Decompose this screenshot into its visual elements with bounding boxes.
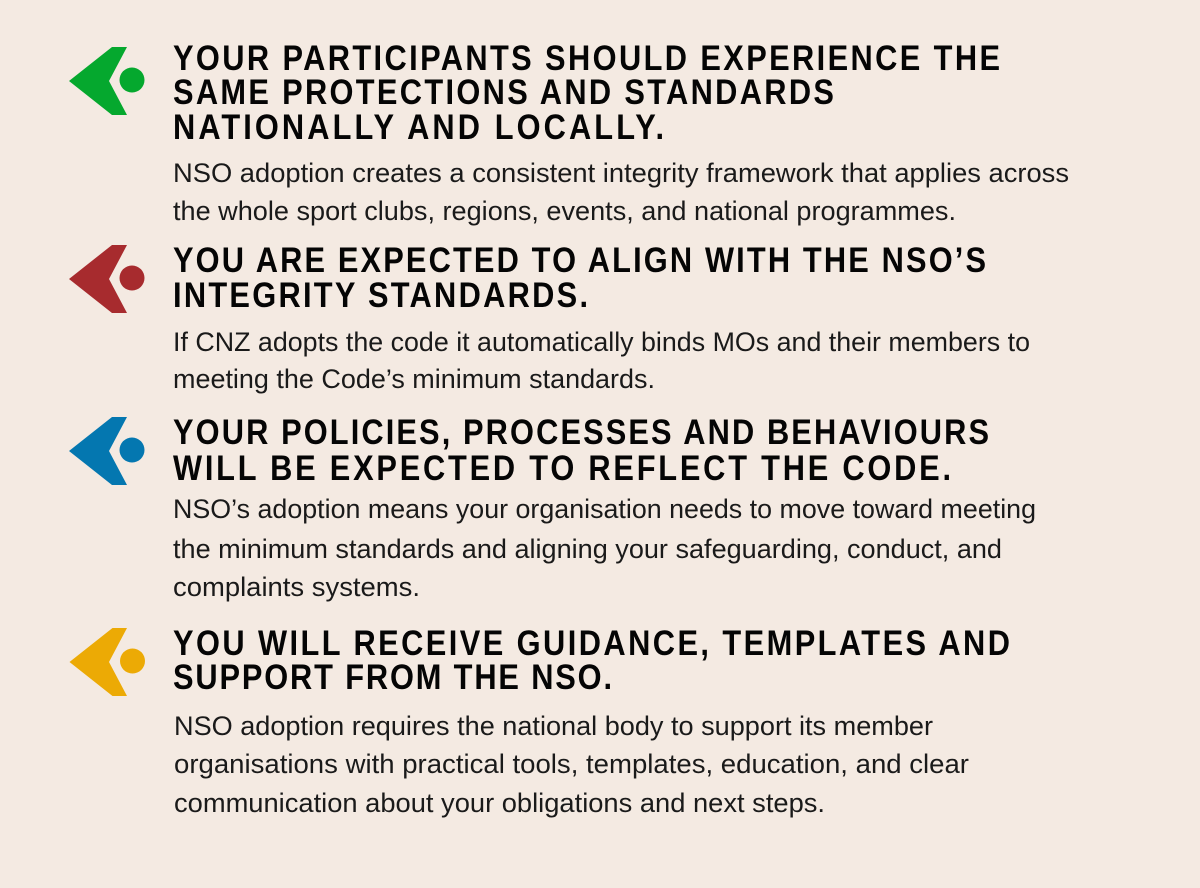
panel: consistent protections <box>69 38 1069 226</box>
text: policies body <box>173 494 1036 602</box>
heading: align: YOU ARE EXPECTED TO ALIGN WITH THE NSO’S <box>173 240 986 279</box>
panel: align with standards <box>69 240 1030 394</box>
text: participants body: the whole sport clubs, regions, events, and national programmes. <box>173 196 956 226</box>
panel: guidance and support <box>70 623 1010 818</box>
text: guidance body: communication about your obligations and next steps. <box>174 788 825 818</box>
text: align body: meeting the Code’s minimum standards. <box>173 364 655 394</box>
heading: align <box>173 240 986 314</box>
heading: participants: NATIONALLY AND LOCALLY. <box>173 107 664 146</box>
heading: guidance: SUPPORT FROM THE NSO. <box>173 657 612 696</box>
text: guidance body: NSO adoption requires the national body to support its member <box>174 711 933 741</box>
text: participants body <box>173 158 1069 226</box>
heading: guidance <box>173 623 1010 696</box>
heading: participants <box>173 38 1000 146</box>
heading: policies: YOUR POLICIES, PROCESSES AND BEHAVIOURS <box>173 412 989 451</box>
panel: policies reflect code <box>69 412 1036 602</box>
heading: guidance: YOU WILL RECEIVE GUIDANCE, TEMPLATES AND <box>173 623 1010 662</box>
heading: participants: SAME PROTECTIONS AND STANDARDS <box>173 72 834 111</box>
heading: policies: WILL BE EXPECTED TO REFLECT THE CODE. <box>173 448 951 487</box>
icon: yellow arrow and dot <box>70 628 145 696</box>
icon: red arrow and dot <box>69 245 144 313</box>
text: participants body: NSO adoption creates a consistent integrity framework that applies across <box>173 158 1069 188</box>
text: align body: If CNZ adopts the code it automatically binds MOs and their members to <box>173 327 1030 357</box>
text: align body <box>173 327 1030 394</box>
text: guidance body: organisations with practical tools, templates, education, and clear <box>174 749 969 779</box>
heading: align: INTEGRITY STANDARDS. <box>173 275 588 314</box>
icon: green arrow and dot <box>69 47 144 115</box>
text: policies body: complaints systems. <box>173 572 420 602</box>
text: guidance body <box>174 711 969 818</box>
heading: participants: YOUR PARTICIPANTS SHOULD EXPERIENCE THE <box>173 38 1000 77</box>
text: policies body: the minimum standards and aligning your safeguarding, conduct, and <box>173 534 1002 564</box>
icon: blue arrow and dot <box>69 417 144 485</box>
heading: policies <box>173 412 989 487</box>
text: policies body: NSO’s adoption means your organisation needs to move toward meeting <box>173 494 1036 524</box>
